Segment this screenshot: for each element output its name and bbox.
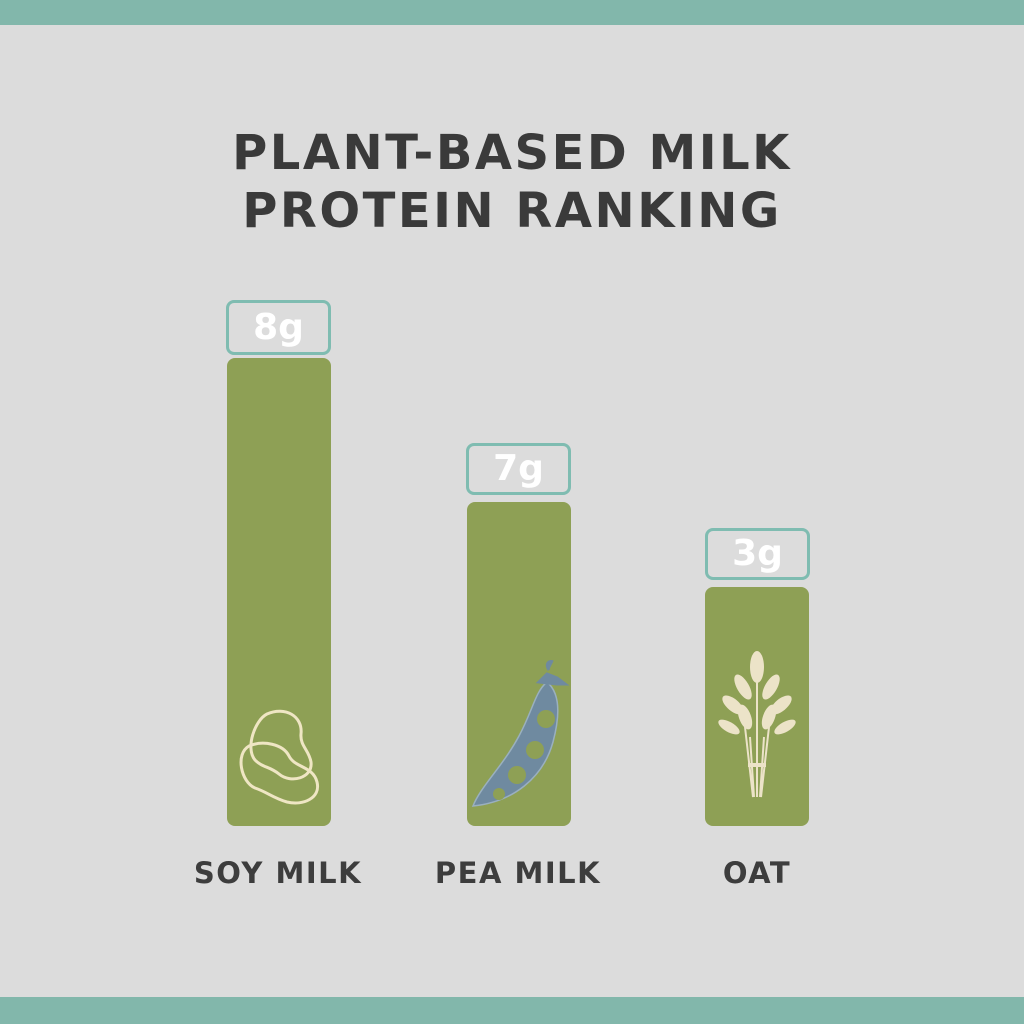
icon: wheat bundle — [718, 651, 796, 798]
title: PROTEIN RANKING — [242, 183, 782, 239]
value label: pea 7g — [466, 443, 571, 495]
top band — [0, 0, 1024, 25]
value label: soy 8g: 8g — [253, 307, 304, 348]
bar: oat — [705, 587, 809, 826]
x label: pea milk: PEA MILK — [435, 856, 601, 890]
bar: soy — [227, 358, 331, 826]
x label: soy milk: SOY MILK — [194, 856, 362, 890]
value label: oat 3g — [705, 528, 810, 580]
title — [232, 125, 792, 239]
chart — [226, 300, 810, 826]
icon: pea pod — [472, 660, 570, 807]
icon: soybeans — [240, 710, 320, 804]
x label: oat: OAT — [723, 856, 791, 890]
value label: soy 8g — [226, 300, 331, 355]
value label: oat 3g: 3g — [732, 533, 783, 574]
bar: pea — [467, 502, 571, 826]
bottom band — [0, 997, 1024, 1024]
value label: pea 7g: 7g — [493, 448, 544, 489]
title: PLANT-BASED MILK — [232, 125, 792, 181]
